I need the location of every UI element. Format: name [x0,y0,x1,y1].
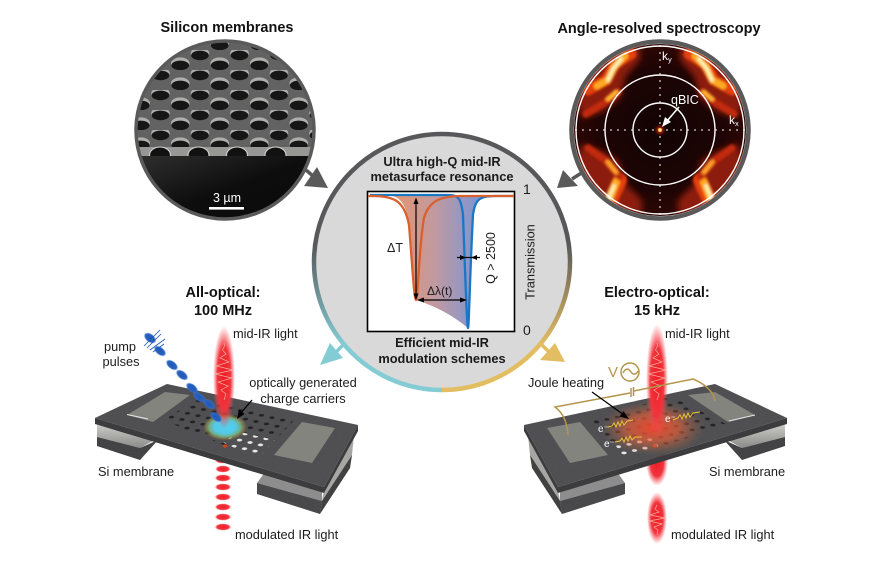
label: charge carriers: optically generated [249,375,357,390]
label: qBIC: qBIC [671,93,699,107]
arrow: to electro-optical [540,343,565,362]
arrow: carriers [237,400,252,419]
blue resonance curve [370,195,514,328]
heading: modulation schemes [378,335,506,366]
arrow: silicon to resonance [304,167,328,188]
label: mid-IR light: mid-IR light [233,326,298,341]
label: Si membrane: Si membrane [98,464,174,479]
label: kx: k [729,113,735,127]
rings [576,46,744,214]
electrons: e⁻ [604,439,615,450]
circuit wire [555,379,715,435]
panel: silicon membrane micrograph [134,39,316,221]
voltage source [608,363,639,381]
pump pulses [142,330,224,424]
label: charge carriers [249,375,357,406]
label: charge carriers: charge carriers [260,391,346,406]
label: ky: y [668,55,672,64]
heading: electro-optical [604,285,710,319]
mid-IR wave [215,343,233,400]
voltage source: V [608,364,618,381]
arrow: qBIC [662,107,679,127]
scale bar: 3 µm [209,191,244,210]
label: Q: Q > 2500 [484,232,498,284]
heading: all-optical: 100 MHz [194,303,252,319]
mid-IR beam [646,324,668,438]
panel: central resonance circle [314,134,570,390]
mid-IR beam [213,326,235,430]
arrow: to all-optical [320,343,344,365]
label: pump pulses: pump [104,339,136,354]
electrons [598,412,700,450]
electrons: e⁻ [598,424,609,435]
heading: modulation schemes: Efficient mid-IR [395,335,489,350]
heading: modulation schemes: modulation schemes [378,351,506,366]
electrons: e⁻ [665,414,676,425]
mid-IR wave [648,343,666,400]
arrow: linewidth [457,255,480,260]
label: Joule heating: Joule heating [528,375,604,390]
arrow: delta lambda [417,298,467,302]
pump wave [144,330,165,352]
label: pump pulses: pulses [102,354,140,369]
label: pump pulses [102,339,140,369]
arrow: Joule heating [592,392,629,419]
label: delta T: ΔT [387,241,403,255]
panel: all-optical device [95,326,358,542]
modulated wave [649,505,665,535]
heated area [601,401,705,455]
supports [97,425,354,514]
heading: silicon membranes: Silicon membranes [161,20,293,36]
heading: all-optical [186,285,260,319]
beam below membrane [646,438,668,486]
label: Si membrane: Si membrane [709,464,785,479]
lobes [576,46,744,214]
label: ky: k [662,49,668,63]
membrane plate [524,384,787,493]
heading: electro-optical: Electro-optical: [604,285,710,301]
label: modulated IR light: modulated IR light [235,527,339,542]
modulated IR pulse [647,492,667,544]
panel: angle-resolved map [572,42,748,218]
charge carrier spot [203,414,247,440]
label: mid-IR light: mid-IR light [665,326,730,341]
axis tick: 0: 0 [523,322,531,338]
shaded shift region [392,196,490,328]
heading: electro-optical: 15 kHz [634,303,680,319]
heading: resonance [371,154,513,184]
label: delta lambda: Δλ(t) [427,284,452,298]
arrow: delta T [414,198,418,300]
label: kx: x [735,119,739,128]
modulated pulses [215,456,231,530]
panel: electro-optical device [524,324,787,544]
chart: transmission spectrum [368,181,538,338]
heading: angle-resolved spectroscopy: Angle-resolved spectroscopy [557,21,761,37]
label: modulated IR light: modulated IR light [671,527,775,542]
scale bar: 3 µm: 3 µm [213,191,241,205]
membrane plate [95,384,358,493]
heading: resonance: metasurface resonance [371,169,513,184]
dashed axes [575,45,745,215]
axis label: transmission: Transmission [522,224,538,300]
heading: resonance: Ultra high-Q mid-IR [383,154,501,169]
heading: all-optical: All-optical: [186,285,260,301]
axis tick: 1: 1 [523,181,531,197]
arrow: spectroscopy to resonance [557,170,583,188]
supports [528,425,785,514]
orange resonance curve [368,196,514,300]
